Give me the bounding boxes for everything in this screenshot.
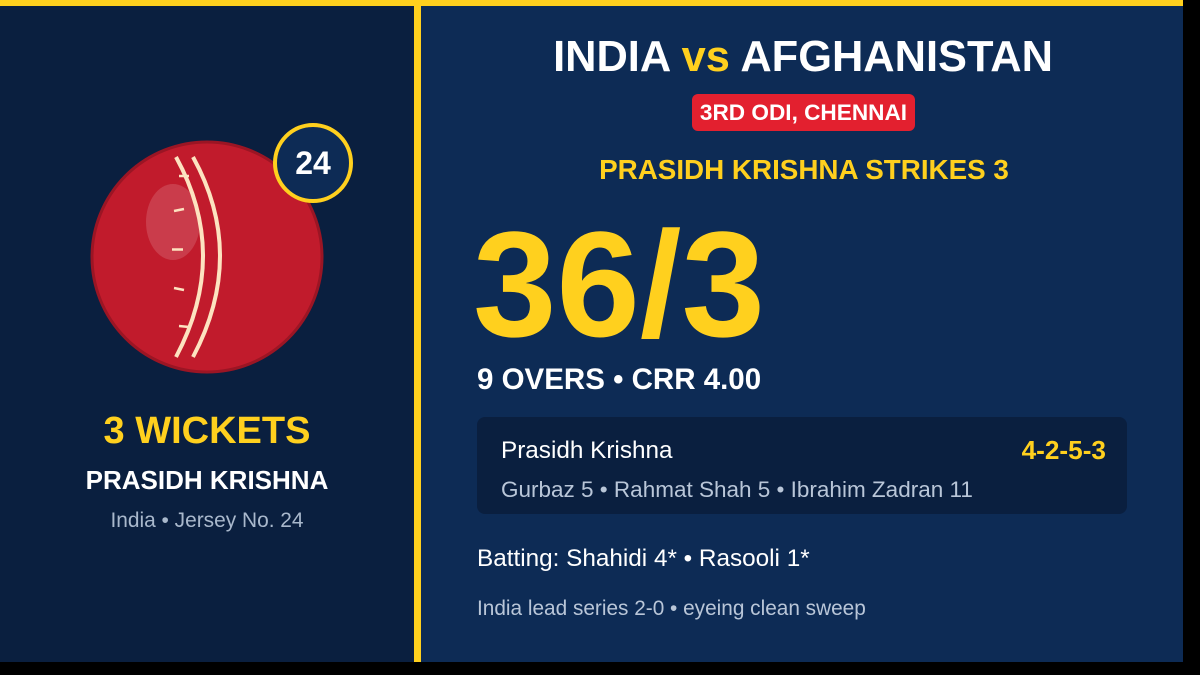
not out batters: Batting: Shahidi 4* • Rasooli 1* bbox=[477, 544, 810, 572]
player team and jersey: India • Jersey No. 24 bbox=[110, 509, 304, 532]
player name: PRASIDH KRISHNA bbox=[86, 465, 328, 495]
left panel bbox=[0, 0, 414, 662]
top accent bar bbox=[0, 0, 1183, 6]
bowling figures card bbox=[477, 417, 1127, 514]
wickets heading: 3 WICKETS bbox=[104, 410, 310, 452]
overs and run rate: 9 OVERS • CRR 4.00 bbox=[477, 362, 761, 396]
match tag bbox=[692, 94, 915, 131]
panel divider bbox=[414, 0, 421, 662]
series note: India lead series 2-0 • eyeing clean sweep bbox=[477, 596, 866, 620]
jersey number badge bbox=[273, 123, 353, 203]
headline: PRASIDH KRISHNA STRIKES 3 bbox=[599, 154, 1009, 185]
icon: cricket ball bbox=[90, 140, 324, 374]
jersey number badge: 24 bbox=[295, 145, 331, 181]
dismissed batters: Gurbaz 5 • Rahmat Shah 5 • Ibrahim Zadran 11 bbox=[501, 476, 973, 502]
bowling figures: 4-2-5-3 bbox=[1022, 435, 1106, 465]
bowler name: Prasidh Krishna bbox=[501, 437, 673, 464]
right panel bbox=[421, 0, 1183, 662]
match tag: 3RD ODI, CHENNAI bbox=[700, 100, 907, 125]
score: 36/3 bbox=[473, 200, 765, 368]
match title: INDIA vs AFGHANISTAN bbox=[553, 33, 1053, 81]
